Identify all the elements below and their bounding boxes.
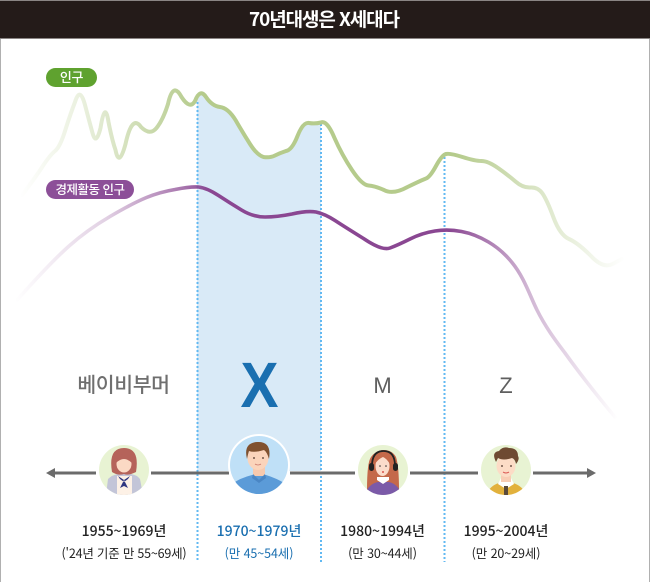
legend: economically active population: 경제활동 인구 — [55, 179, 125, 198]
caption: Z generation: (만 20~29세) — [472, 543, 540, 562]
caption: baby boomers: ('24년 기준 만 55~69세) — [62, 543, 186, 562]
legend: population: 인구 — [60, 67, 83, 86]
caption: baby boomers: 1955~1969년 — [82, 521, 166, 541]
label: M: M — [373, 373, 392, 398]
label: X: X — [240, 349, 279, 421]
caption: Z generation — [464, 521, 548, 562]
panel: X generation highlight — [197, 93, 321, 471]
caption: Z generation: 1995~2004년 — [464, 521, 548, 541]
caption: M generation: 1980~1994년 — [340, 521, 425, 541]
icon: Z generation man — [481, 445, 531, 496]
caption: baby boomers — [62, 521, 186, 562]
generation boundary lines — [198, 102, 444, 562]
title bar: 70년대생은 X세대다 — [249, 5, 401, 32]
caption: X generation: (만 45~54세) — [225, 543, 293, 562]
timeline arrow — [46, 468, 596, 478]
label: Z: Z — [499, 373, 513, 398]
line: population — [22, 90, 622, 265]
legend: population — [46, 67, 97, 87]
caption: X generation — [217, 521, 301, 562]
label: baby boomers: 베이비부머 — [77, 368, 170, 398]
caption: M generation: (만 30~44세) — [348, 543, 417, 562]
icon: baby boomer woman — [99, 445, 149, 496]
caption: X generation: 1970~1979년 — [217, 521, 301, 541]
caption: M generation — [340, 521, 425, 562]
icon: M generation woman — [358, 445, 408, 496]
icon: X generation man — [228, 434, 290, 496]
title bar — [0, 0, 650, 39]
line: economically active population — [17, 187, 615, 417]
